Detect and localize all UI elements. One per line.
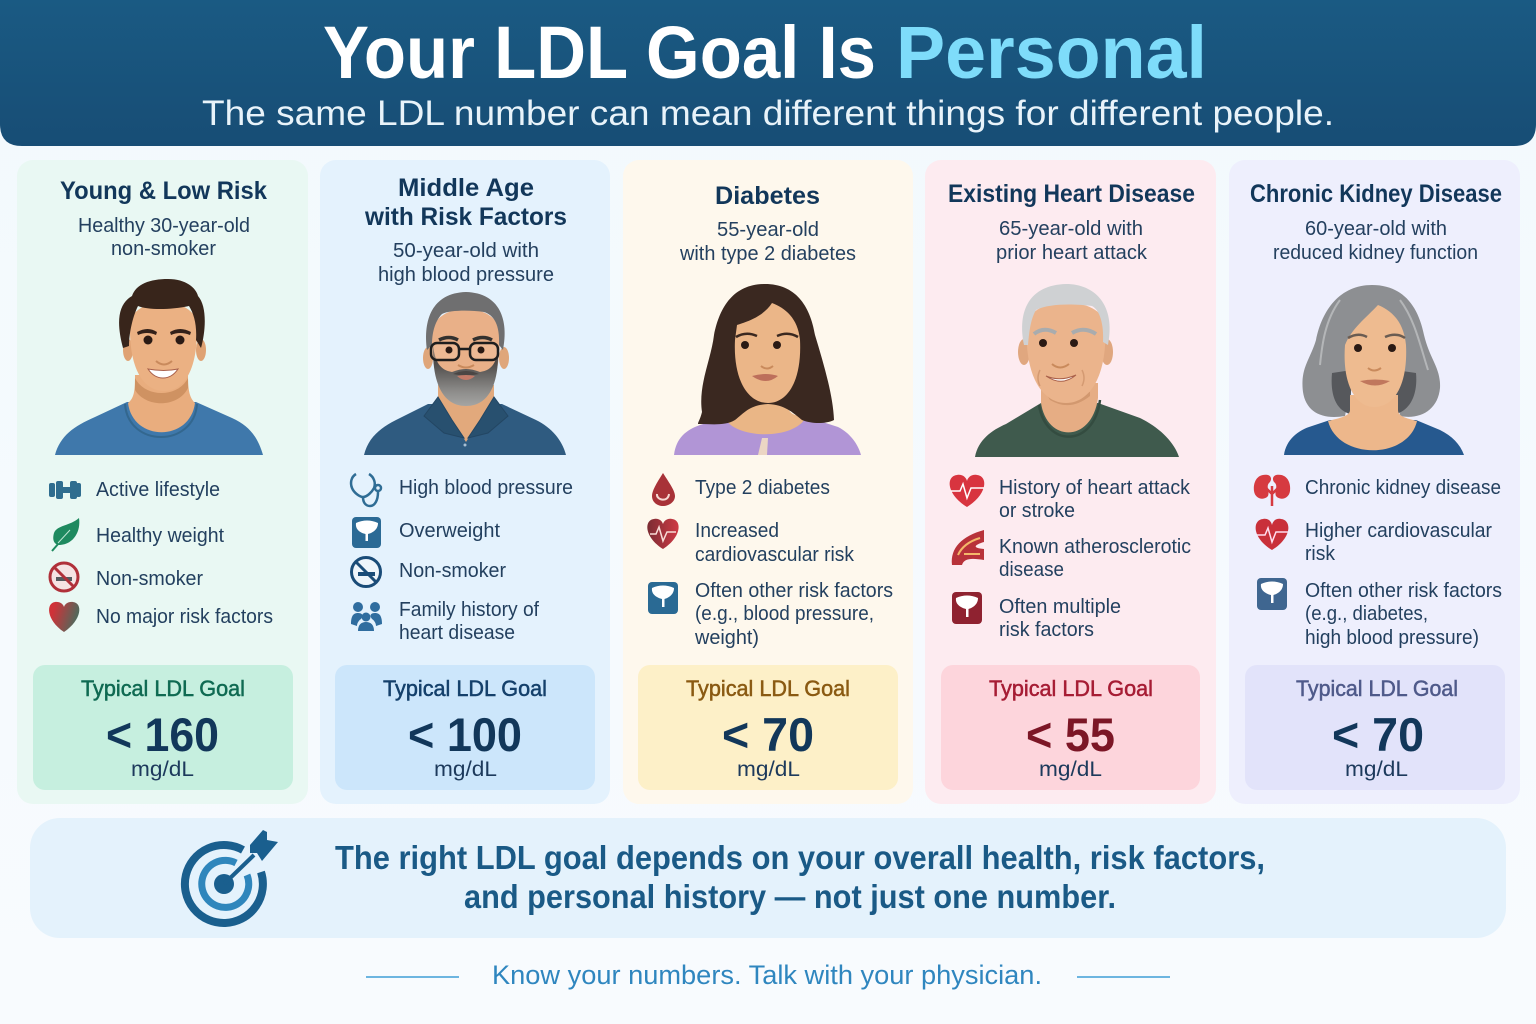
goal box: mg/dL (1039, 758, 1102, 781)
heading: Existing Heart Disease (948, 180, 1195, 208)
feature: heart attack history (999, 477, 1191, 522)
goal box: Typical LDL Goal (81, 676, 245, 701)
icon: heart with pulse (950, 475, 984, 507)
description: 50-year-old with (393, 240, 539, 262)
description: 65-year-old with (999, 218, 1143, 240)
feature: chronic kidney disease: Chronic kidney disease (1305, 477, 1501, 499)
subtitle: The same LDL number can mean different things for different people. (202, 94, 1334, 133)
icon: stethoscope (351, 474, 381, 506)
icon: heart with pulse (1256, 519, 1288, 550)
portrait: woman with dark hair (674, 284, 861, 455)
feature: heart attack history: History of heart attack (999, 477, 1191, 499)
feature: cardiovascular risk: risk (1305, 543, 1336, 565)
feature: overweight: Overweight (399, 520, 500, 542)
panel: middle age with risk factors (320, 160, 610, 804)
heading: Chronic Kidney Disease (1250, 180, 1502, 208)
feature: atherosclerotic disease: disease (999, 559, 1064, 581)
goal box: Typical LDL Goal (383, 676, 547, 701)
feature: atherosclerotic disease (999, 536, 1191, 581)
feature: cardiovascular risk (695, 520, 855, 566)
feature: multiple risk factors: Often multiple (999, 596, 1121, 618)
feature: other risk factors: (e.g., diabetes, (1305, 603, 1428, 625)
description: with type 2 diabetes (679, 243, 856, 265)
description (679, 219, 856, 265)
portrait: middle-aged man with glasses (364, 292, 566, 455)
description: reduced kidney function (1273, 242, 1478, 264)
icon: heart (49, 602, 79, 632)
description: prior heart attack (996, 242, 1148, 264)
goal box (1245, 665, 1505, 790)
heading: with Risk Factors (364, 203, 567, 231)
icon: kidneys (1254, 475, 1290, 506)
description: Healthy 30-year-old (78, 215, 250, 237)
feature: healthy weight: Healthy weight (96, 525, 224, 547)
description: 60-year-old with (1305, 218, 1447, 240)
goal box: mg/dL (1345, 758, 1408, 781)
icon: scale (952, 592, 982, 624)
icon: target with arrow (185, 830, 278, 923)
goal box: Typical LDL Goal (989, 676, 1153, 701)
feature: multiple risk factors (999, 596, 1121, 641)
goal box (33, 665, 293, 790)
icon: dumbbell (49, 481, 81, 499)
description (78, 215, 250, 260)
footer tagline: Know your numbers. Talk with your physician. (492, 960, 1042, 990)
feature: high blood pressure: High blood pressure (399, 477, 573, 499)
portrait: young man (55, 279, 263, 455)
portrait: older man with grey hair (975, 284, 1179, 457)
icon: heart with pulse (647, 519, 679, 549)
icon: artery (952, 530, 984, 565)
description: non-smoker (111, 238, 216, 260)
icon: no smoking blue (352, 558, 380, 586)
feature: other risk factors: weight) (694, 627, 759, 649)
feature: other risk factors: Often other risk factors (1305, 580, 1502, 602)
feature: other risk factors: high blood pressure) (1305, 627, 1479, 649)
title: Your LDL Goal Is (323, 11, 876, 94)
callout text (335, 839, 1265, 915)
goal box: < 70 (1332, 708, 1424, 761)
goal box (638, 665, 898, 790)
title highlight: Personal (896, 11, 1207, 94)
icon: scale (1257, 578, 1287, 610)
panel: diabetes (623, 160, 913, 804)
goal box: Typical LDL Goal (686, 676, 850, 701)
description (378, 240, 554, 286)
icon: scale (648, 582, 678, 614)
feature: other risk factors: (e.g., blood pressure, (695, 603, 874, 625)
panel: existing heart disease (925, 160, 1216, 804)
description: high blood pressure (378, 264, 554, 286)
heading (364, 174, 567, 231)
callout text: and personal history — not just one number. (464, 878, 1116, 915)
feature: no major risk factors: No major risk factors (96, 606, 273, 628)
goal box: < 55 (1026, 708, 1115, 761)
feature: multiple risk factors: risk factors (999, 619, 1094, 641)
icon: blood drop (652, 473, 675, 506)
feature: type 2 diabetes: Type 2 diabetes (695, 477, 830, 499)
icon: family (351, 602, 382, 631)
goal box (941, 665, 1200, 790)
feature: heart attack history: or stroke (999, 500, 1075, 522)
description (996, 218, 1148, 264)
feature: cardiovascular risk: Increased (695, 520, 779, 542)
feature: other risk factors (694, 580, 893, 649)
goal box: < 100 (408, 708, 522, 761)
description (1273, 218, 1478, 264)
callout band (30, 818, 1506, 938)
goal box (335, 665, 595, 790)
description: 55-year-old (717, 219, 819, 241)
feature: cardiovascular risk: Higher cardiovascular (1305, 520, 1492, 542)
portrait: older woman with grey bob (1284, 285, 1464, 455)
goal box: < 160 (106, 708, 219, 761)
header banner (0, 0, 1536, 146)
heading: Young & Low Risk (60, 177, 267, 205)
goal box: < 70 (722, 708, 814, 761)
feature: family history (399, 599, 539, 644)
feature: non-smoker: Non-smoker (96, 568, 203, 590)
icon: leaf (52, 518, 79, 551)
panel: young and low risk (17, 160, 308, 804)
feature: atherosclerotic disease: Known atherosclerotic (999, 536, 1191, 558)
callout text: The right LDL goal depends on your overall health, risk factors, (335, 839, 1265, 876)
goal box: Typical LDL Goal (1296, 676, 1458, 701)
feature: other risk factors: Often other risk factors (695, 580, 893, 602)
feature: family history: heart disease (399, 622, 515, 644)
feature: cardiovascular risk: cardiovascular risk (695, 544, 855, 566)
goal box: mg/dL (434, 758, 497, 781)
icon: no smoking red (50, 563, 78, 591)
feature: other risk factors (1305, 580, 1502, 649)
goal box: mg/dL (737, 758, 800, 781)
heading: Middle Age (398, 174, 534, 202)
feature: cardiovascular risk (1305, 520, 1492, 565)
icon: scale (352, 517, 381, 548)
feature: active lifestyle: Active lifestyle (96, 479, 220, 501)
panel: chronic kidney disease (1229, 160, 1520, 804)
feature: family history: Family history of (399, 599, 539, 621)
feature: non-smoker: Non-smoker (399, 560, 506, 582)
goal box: mg/dL (131, 758, 194, 781)
heading: Diabetes (715, 182, 820, 210)
